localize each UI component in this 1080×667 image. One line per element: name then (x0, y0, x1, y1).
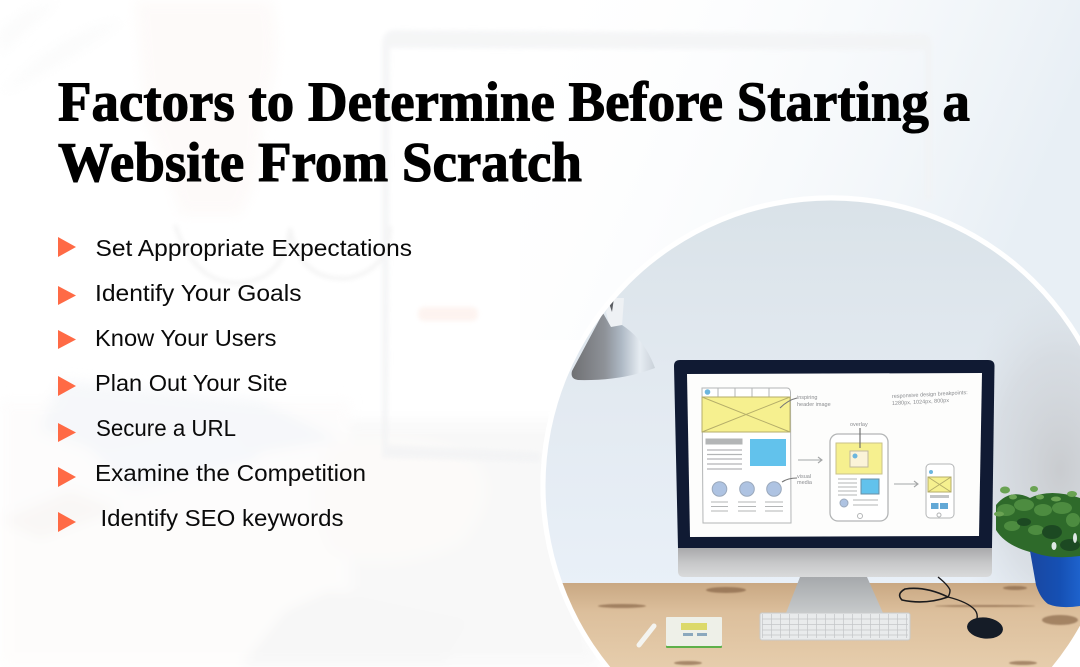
monitor (674, 360, 994, 613)
hands (315, 438, 483, 560)
title: Website From Scratch (58, 132, 582, 194)
title: Factors to Determine Before Starting a (58, 72, 970, 134)
keyboard stripes (40, 380, 340, 470)
wireframe handwritten notes: 1280px, 1024px, 800px (892, 398, 949, 407)
list item: Identify Your Goals: Identify Your Goals (95, 280, 302, 306)
mouse and cable (900, 577, 1004, 640)
blurred background monitor (175, 30, 932, 462)
desk lamp (572, 298, 655, 380)
monitor chin (678, 548, 992, 577)
wireframe handwritten notes: overlay (850, 422, 868, 428)
wireframes on screen (702, 388, 968, 523)
phone wireframe (926, 464, 954, 518)
wireframe handwritten notes (797, 390, 968, 486)
list item: Plan Out Your Site: Plan Out Your Site (95, 370, 288, 396)
list item: Identify SEO keywords: Identify SEO keywords (100, 505, 344, 531)
desktop wireframe (702, 388, 791, 523)
wall (540, 195, 1080, 590)
monitor screen (687, 373, 982, 537)
plant pot (1030, 551, 1080, 607)
monitor bezel (674, 360, 994, 548)
tablet under hands (240, 590, 470, 667)
person silhouette (135, 0, 277, 215)
wireframe handwritten notes: responsive design breakpoints: (892, 390, 968, 400)
potted plant (994, 486, 1080, 607)
plant leaves (994, 486, 1080, 558)
keyboard (760, 613, 910, 640)
title (58, 72, 970, 194)
list item: Set Appropriate Expectations: Set Appropriate Expectations (96, 235, 412, 261)
tablet wireframe (830, 434, 888, 521)
wireframe handwritten notes: media (797, 480, 813, 486)
bullet list (58, 235, 412, 532)
list item: Know Your Users: Know Your Users (95, 325, 276, 351)
list item: Examine the Competition: Examine the Competition (95, 460, 366, 486)
lower haze (340, 420, 600, 667)
wireframe arrows (780, 398, 918, 487)
notebook and pen (639, 617, 722, 648)
list item: Secure a URL: Secure a URL (96, 415, 236, 441)
desk (540, 583, 1080, 667)
monitor stand (786, 577, 883, 613)
leaves (0, 20, 125, 95)
wireframe handwritten notes: visual (797, 474, 811, 480)
wireframe handwritten notes: inspiring (797, 395, 817, 401)
circular photo: desk with monitor (540, 195, 1080, 667)
wireframe handwritten notes: header image (797, 402, 831, 408)
